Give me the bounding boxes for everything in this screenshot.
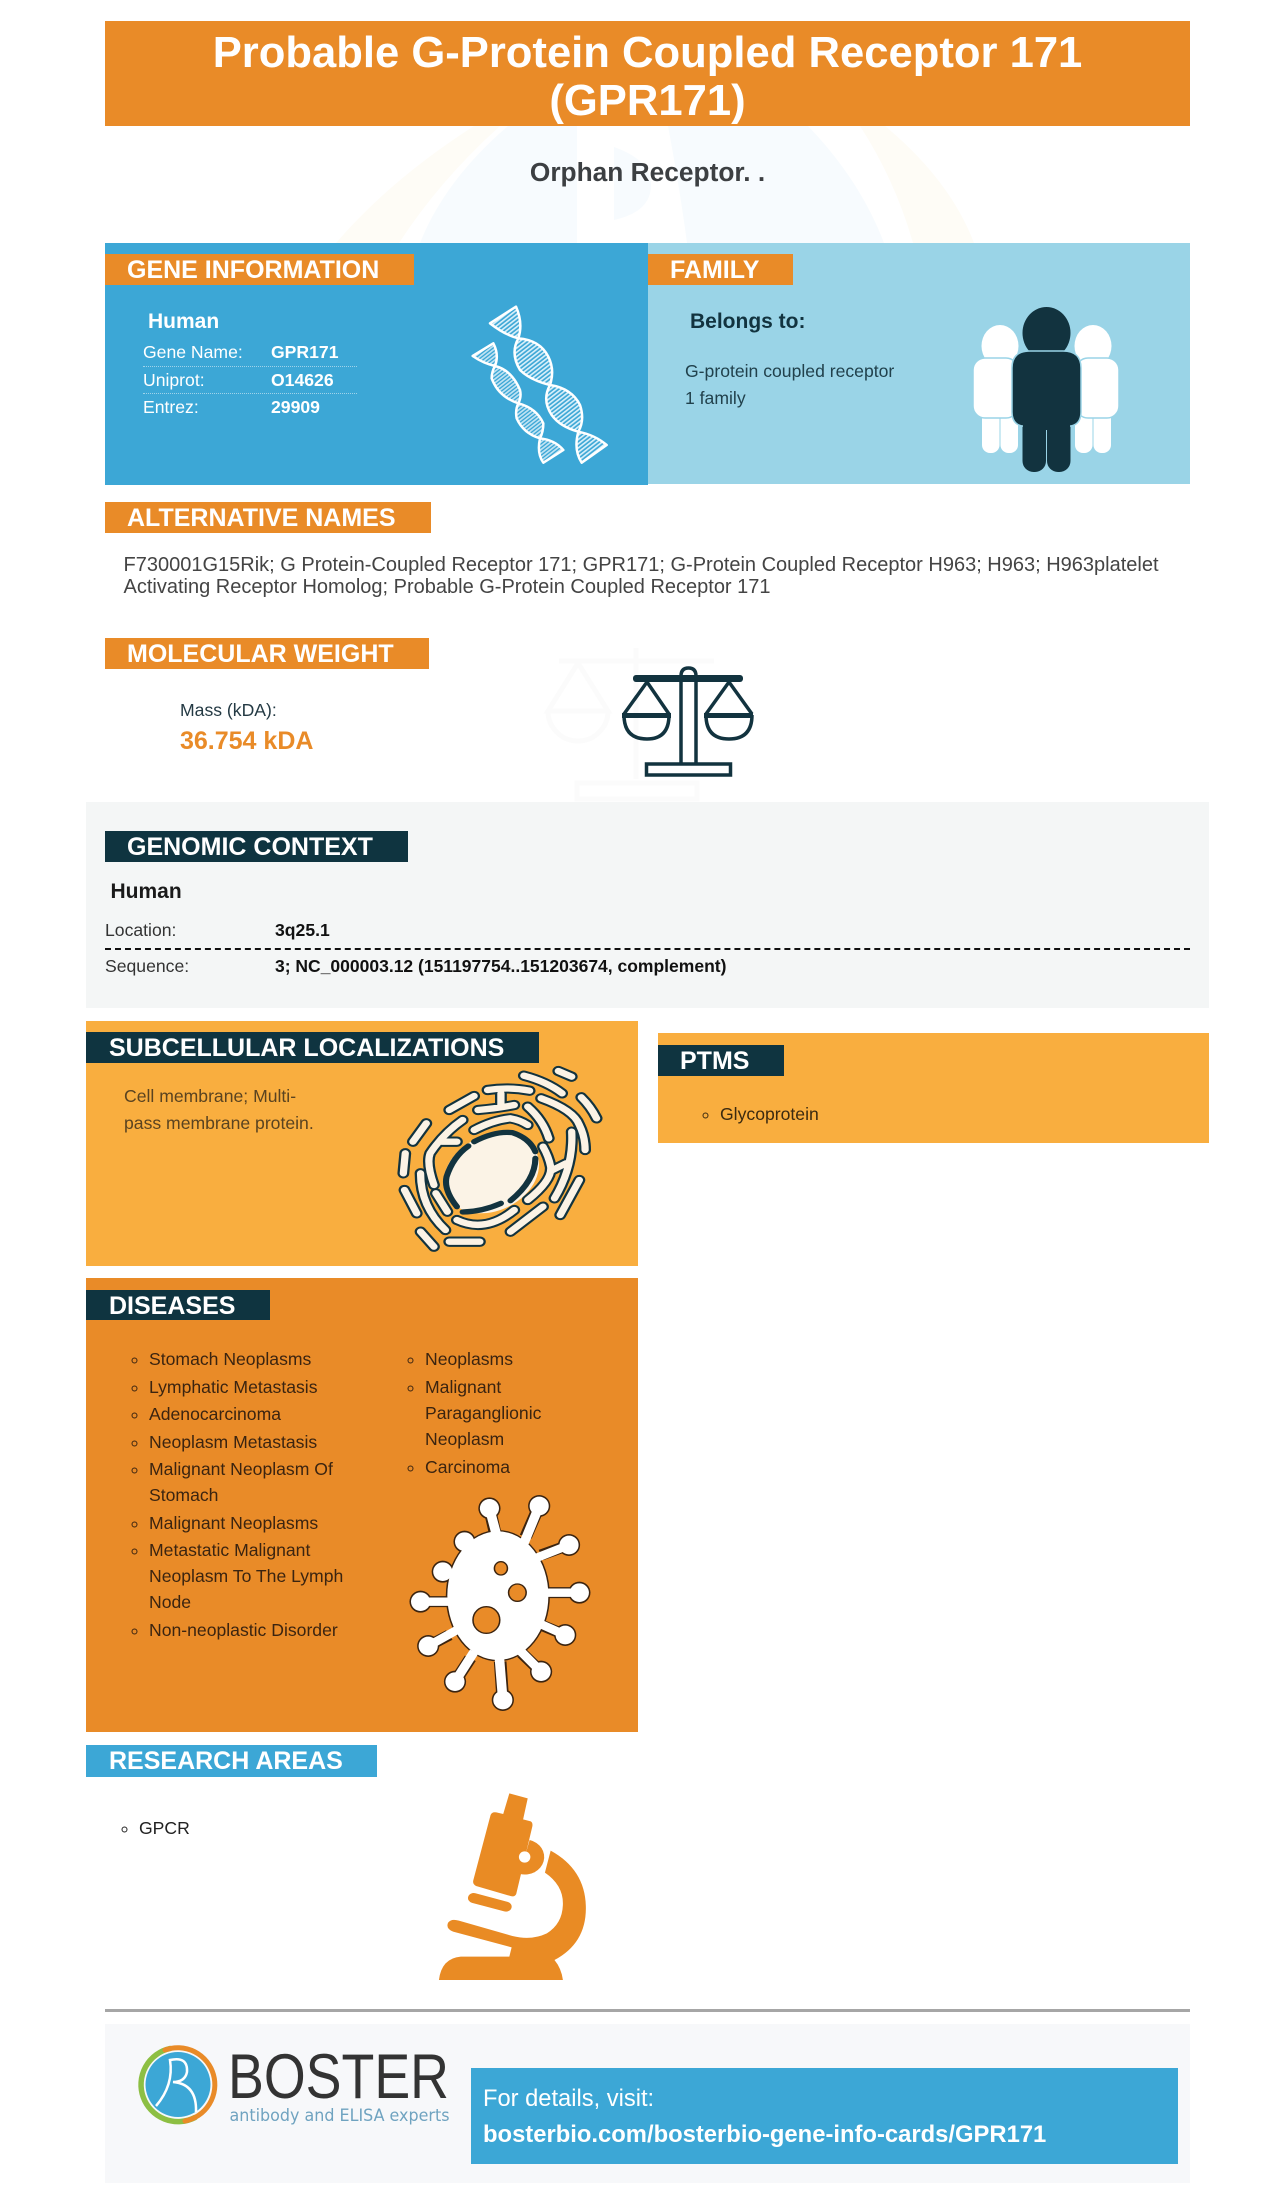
heading: gene information: GENE INFORMATION [127, 256, 379, 284]
gene name row [143, 338, 357, 366]
watermark scale [540, 643, 730, 802]
icon: microscope [438, 1793, 586, 1980]
disease list column 1: Node [149, 1592, 191, 1612]
localization text: pass membrane protein. [124, 1112, 314, 1132]
species label: Human [110, 880, 182, 903]
icon: cell with organelles [397, 1066, 603, 1252]
heading: PTMs: PTMS [680, 1047, 749, 1075]
call to action box [471, 2068, 1178, 2164]
localization text: Cell membrane; Multi- [124, 1086, 296, 1106]
disease list column 2: Paraganglionic [425, 1402, 541, 1422]
mass label: Mass (kDA): [180, 700, 277, 720]
panel: PTMs [658, 1033, 1209, 1143]
uniprot row: Uniprot: [143, 370, 205, 390]
disease list column 2: Malignant [425, 1376, 501, 1396]
heading: family [648, 254, 793, 285]
row divider [105, 948, 1190, 952]
heading: genomic context: GENOMIC CONTEXT [127, 833, 373, 861]
panel: family [648, 243, 1190, 484]
alternative names text: F730001G15Rik; G Protein-Coupled Receptor 171; GPR171; G-Protein Coupled Receptor H963; H963; H963platelet [124, 554, 1159, 576]
Boster logo: antibody and ELISA experts [230, 2106, 450, 2126]
gene fact table [143, 342, 357, 417]
disease list column 2: Carcinoma [425, 1456, 510, 1476]
PTM list: Glycoprotein [720, 1104, 819, 1124]
icon: virus [409, 1495, 590, 1711]
Boster logo [138, 2042, 450, 2126]
disease list column 1: Non-neoplastic Disorder [149, 1620, 338, 1640]
mass value: 36.754 kDA [180, 727, 313, 755]
disease list column 1: Neoplasm Metastasis [149, 1432, 317, 1452]
disease list column 2: Neoplasm [425, 1428, 504, 1448]
belongs to label: Belongs to: [690, 310, 806, 332]
heading: family: FAMILY [670, 256, 759, 284]
disease list column 1: Malignant Neoplasm Of [149, 1459, 333, 1479]
call to action label: For details, visit: [483, 2086, 654, 2112]
disease list column 2 [408, 1349, 541, 1476]
disease list column 1: Stomach Neoplasms [149, 1349, 311, 1369]
icon: DNA helix [471, 305, 608, 464]
heading: research areas: RESEARCH AREAS [109, 1747, 343, 1775]
disease list column 1 [132, 1349, 343, 1640]
panel: genomic context [86, 802, 1209, 1008]
family description: G-protein coupled receptor [685, 361, 894, 381]
heading: molecular weight: MOLECULAR WEIGHT [127, 640, 394, 668]
heading: diseases [86, 1290, 270, 1320]
disease list column 1: Metastatic Malignant [149, 1540, 310, 1560]
uniprot row [143, 366, 357, 394]
background watermark logo [336, 126, 974, 243]
call to action link: bosterbio.com/bosterbio-gene-info-cards/GPR171 [483, 2121, 1046, 2148]
alternative names text [124, 554, 1159, 598]
sequence row: 3; NC_000003.12 (151197754..151203674, complement) [275, 956, 726, 976]
uniprot row: O14626 [271, 370, 334, 390]
entrez row: Entrez: [143, 397, 199, 417]
alternative names text: Activating Receptor Homolog; Probable G-Protein Coupled Receptor 171 [124, 576, 771, 598]
disease list column 2: Neoplasms [425, 1349, 513, 1369]
panel: diseases [86, 1278, 638, 1732]
title banner [105, 21, 1190, 126]
disease list column 1: Malignant Neoplasms [149, 1512, 318, 1532]
family description [685, 361, 894, 408]
heading: diseases: DISEASES [109, 1292, 235, 1320]
panel: footer [105, 2024, 1190, 2183]
localization text [124, 1086, 314, 1132]
footer divider [105, 2009, 1190, 2012]
disease list column 1: Adenocarcinoma [149, 1404, 281, 1424]
gene name row: Gene Name: [143, 342, 243, 362]
disease list column 1: Lymphatic Metastasis [149, 1376, 318, 1396]
heading: alternative names: ALTERNATIVE NAMES [127, 504, 396, 532]
species label: Human [148, 310, 219, 332]
icon: balance scale [622, 666, 754, 777]
title banner: Probable G-Protein Coupled Receptor 171 [213, 29, 1082, 77]
sequence row: Sequence: [105, 956, 189, 976]
entrez row: 29909 [271, 397, 320, 417]
panel: subcellular localizations [86, 1021, 638, 1266]
disease list column 1: Neoplasm To The Lymph [149, 1566, 343, 1586]
title banner: (GPR171) [549, 77, 746, 125]
icon: group of people [974, 307, 1118, 472]
entrez row [143, 397, 320, 417]
heading: subcellular localizations: SUBCELLULAR LOCALIZATIONS [109, 1034, 504, 1062]
gene name row: GPR171 [271, 342, 338, 362]
location row: 3q25.1 [275, 920, 330, 940]
heading: PTMs [658, 1045, 784, 1076]
subtitle: Orphan Receptor. . [530, 157, 765, 187]
location row [105, 920, 330, 940]
family description: 1 family [685, 388, 746, 408]
disease list column 1: Stomach [149, 1485, 218, 1505]
research area list: GPCR [139, 1818, 190, 1838]
location row: Location: [105, 920, 176, 940]
panel: gene information [105, 243, 648, 485]
